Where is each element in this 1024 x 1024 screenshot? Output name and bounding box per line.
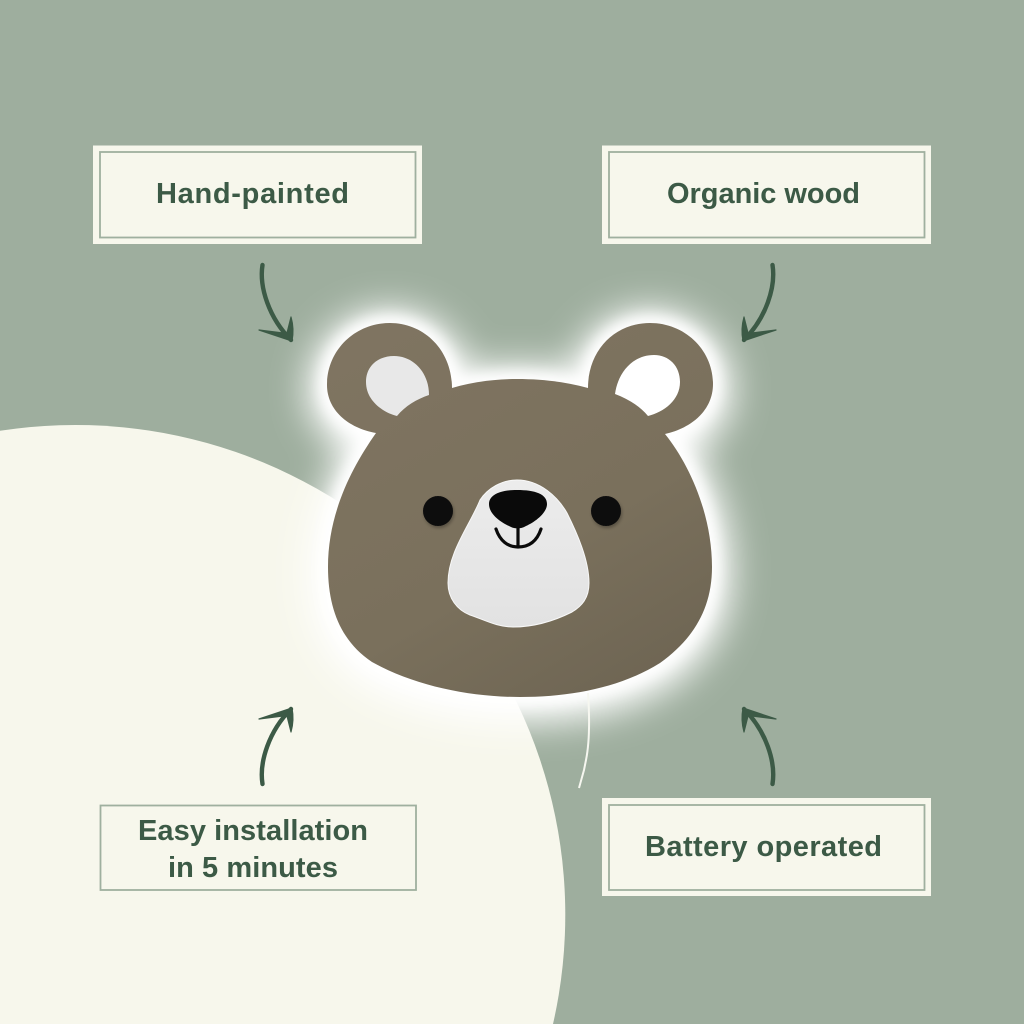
arrow top-left [259, 265, 293, 341]
label: Easy installation: in 5 minutes [168, 852, 338, 884]
label: Easy installation: Easy installation [138, 815, 368, 847]
label: Easy installation [100, 806, 416, 890]
bear lamp [327, 323, 713, 697]
muzzle [448, 480, 589, 627]
head and ears silhouette [327, 323, 713, 697]
label: Hand-painted: Hand-painted [156, 178, 349, 210]
label: Battery operated: Battery operated [645, 831, 882, 863]
right eye [591, 496, 621, 526]
arrow top-right [742, 265, 776, 341]
cream background curve [0, 425, 565, 1024]
arrow bottom-left [259, 708, 293, 784]
label: Battery operated [602, 798, 931, 896]
label: Organic wood [602, 146, 931, 244]
arrow bottom-right [742, 708, 776, 784]
left eye [423, 496, 453, 526]
bear glow [327, 323, 713, 703]
mouth [496, 527, 541, 547]
label: Organic wood: Organic wood [667, 178, 860, 210]
left inner ear [366, 356, 429, 416]
cord [579, 693, 589, 788]
right inner ear [615, 355, 680, 416]
label: Hand-painted [93, 146, 422, 244]
nose [489, 490, 547, 528]
